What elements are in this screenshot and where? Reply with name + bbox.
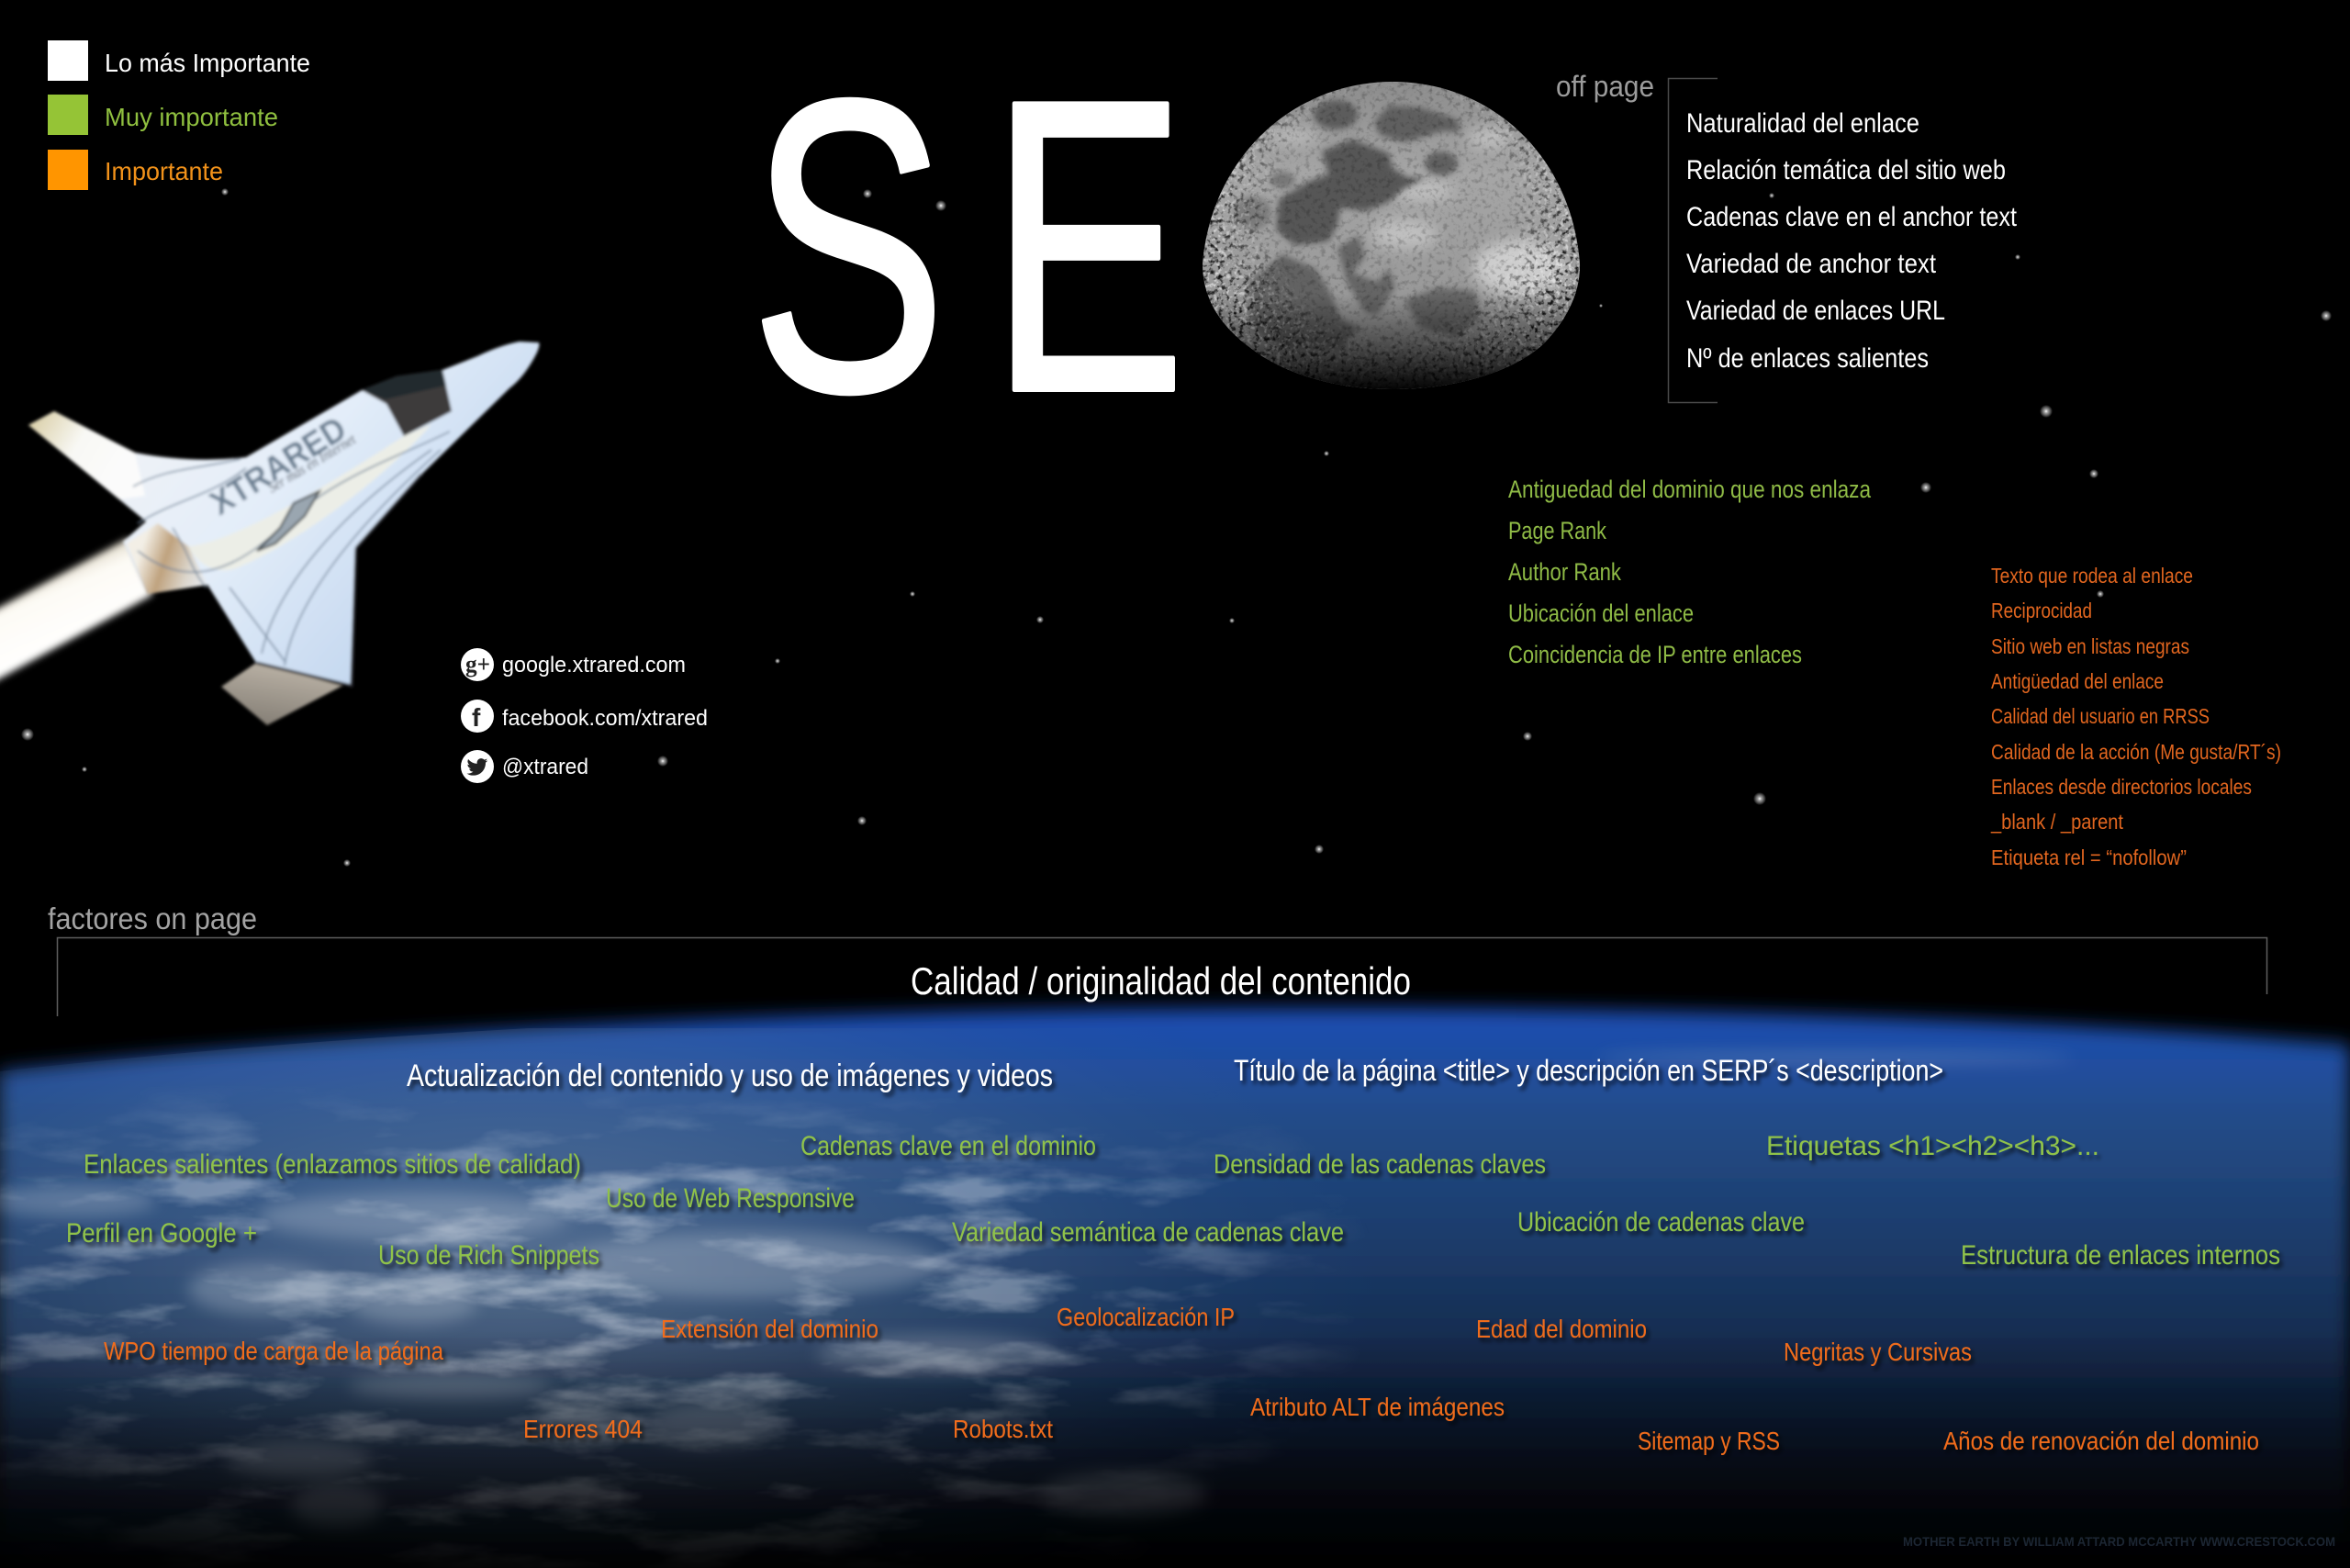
on page list: important: Robots.txt	[953, 1415, 1053, 1443]
off page list: most important: Naturalidad del enlace	[1686, 108, 1919, 139]
off page list: important: Texto que rodea al enlace	[1991, 564, 2193, 588]
clouds texture	[0, 1102, 1328, 1562]
twitter link	[461, 750, 588, 783]
on page list: very important: Perfil en Google +	[66, 1218, 257, 1249]
on page list: very important: Estructura de enlaces internos	[1961, 1240, 2280, 1271]
cream body band	[188, 424, 431, 570]
off page list: very important: Ubicación del enlace	[1508, 599, 1694, 627]
engine plume	[0, 538, 152, 689]
off page list: very important: Antiguedad del dominio que nos enlaza	[1508, 476, 1872, 503]
off page list: most important	[1686, 108, 2018, 374]
google plus link: g+	[465, 651, 490, 678]
legend item: lo más importante	[48, 40, 310, 81]
moon bright areas	[1269, 127, 1565, 296]
off page list: most important: Variedad de anchor text	[1686, 249, 1937, 279]
ship silhouette	[28, 342, 540, 686]
on page list: very important: Enlaces salientes (enlazamos sitios de calidad)	[84, 1149, 581, 1180]
twitter link: @xtrared	[502, 755, 588, 779]
on page list: very important: Cadenas clave en el dominio	[800, 1131, 1096, 1161]
legend item: importante	[48, 150, 223, 190]
off page list: most important: Nº de enlaces salientes	[1686, 343, 1929, 374]
star emblem	[257, 491, 319, 551]
off page bracket	[1669, 79, 1718, 402]
facebook link: facebook.com/xtrared	[502, 706, 708, 731]
off page list: important: Calidad de la acción (Me gusta/RT´s)	[1991, 740, 2281, 764]
off page list: important: Reciprocidad	[1991, 599, 2092, 622]
on page list: important: Atributo ALT de imágenes	[1250, 1393, 1505, 1421]
on page list: very important	[66, 1131, 2280, 1271]
on page list: important: Errores 404	[523, 1415, 643, 1443]
off page list: important: Etiqueta rel = “nofollow”	[1991, 846, 2187, 869]
on page list: very important: Uso de Rich Snippets	[378, 1240, 599, 1271]
on page list: important: Negritas y Cursivas	[1784, 1338, 1972, 1366]
hull panel lines	[133, 431, 450, 666]
on page list: important: Años de renovación del dominio	[1943, 1427, 2259, 1455]
title letters SE: SE	[750, 15, 1186, 478]
off page list: very important	[1508, 476, 1872, 668]
earth horizon and clouds	[0, 1008, 2350, 1568]
off page list: important: Enlaces desde directorios locales	[1991, 775, 2252, 799]
off page list: very important: Coincidencia de IP entre enlaces	[1508, 641, 1802, 668]
off page list: important	[1990, 564, 2281, 869]
facebook link	[461, 700, 708, 733]
ship logo text: XTRARED	[204, 409, 352, 522]
facebook link: f	[472, 703, 481, 732]
legend	[48, 40, 310, 190]
legend item: muy importante	[48, 95, 278, 135]
off page list: most important: Variedad de enlaces URL	[1686, 296, 1945, 326]
off page list: important: Sitio web en listas negras	[1991, 634, 2189, 658]
moon as the O of SEO	[1203, 82, 1581, 389]
wing edge shadow	[256, 475, 421, 686]
off page list: most important: Relación temática del sitio web	[1686, 155, 2006, 185]
on page list: important: Sitemap y RSS	[1638, 1427, 1780, 1455]
on page list: important	[104, 1303, 2259, 1455]
social links	[461, 648, 708, 783]
legend item: lo más importante: Lo más Importante	[105, 49, 310, 77]
lower fin	[221, 663, 342, 725]
google plus link	[461, 648, 686, 681]
on page list: important: WPO tiempo de carga de la página	[104, 1337, 443, 1365]
on page list: most important: Actualización del contenido y uso de imágenes y videos	[407, 1058, 1053, 1093]
on page bracket	[57, 938, 2267, 1016]
cockpit canopy	[362, 370, 452, 436]
off page list: most important: Cadenas clave en el anchor text	[1686, 202, 2018, 232]
on page list: very important: Ubicación de cadenas clave	[1517, 1207, 1805, 1238]
moon maria	[1235, 100, 1481, 349]
on page list: important: Edad del dominio	[1476, 1315, 1647, 1343]
on page list: important: Extensión del dominio	[661, 1315, 878, 1343]
off page list: very important: Author Rank	[1508, 558, 1621, 586]
off page list: important: _blank / _parent	[1990, 810, 2124, 834]
off page list: very important: Page Rank	[1508, 517, 1606, 544]
on page list: very important: Variedad semántica de cadenas clave	[952, 1217, 1344, 1248]
on page list: very important: Uso de Web Responsive	[606, 1183, 855, 1214]
tail fin tip	[28, 411, 145, 499]
cloud masses	[0, 1053, 2075, 1528]
google plus link: google.xtrared.com	[502, 653, 686, 678]
ship slogan text: Ser más en Internet	[265, 431, 359, 496]
legend item: importante: Importante	[105, 157, 223, 185]
star field	[21, 188, 2332, 867]
legend item: muy importante: Muy importante	[105, 103, 278, 131]
on page list: most important: Título de la página <title> y descripción en SERP´s <description>	[1234, 1054, 1943, 1087]
on page list: important: Geolocalización IP	[1057, 1303, 1235, 1331]
factores on page heading: factores on page	[48, 902, 257, 935]
on page list: most important	[407, 1054, 1943, 1093]
spaceship illustration	[0, 342, 540, 725]
top on page factor: Calidad / originalidad del contenido	[911, 959, 1411, 1002]
off page heading: off page	[1556, 70, 1654, 103]
moon crater texture	[1203, 83, 1580, 389]
engine joint	[127, 523, 207, 594]
off page list: important: Calidad del usuario en RRSS	[1991, 704, 2210, 728]
on page list: very important: Etiquetas <h1><h2><h3>...	[1766, 1131, 2099, 1161]
on page list: very important: Densidad de las cadenas claves	[1214, 1149, 1546, 1180]
off page list: important: Antigüedad del enlace	[1991, 669, 2164, 693]
